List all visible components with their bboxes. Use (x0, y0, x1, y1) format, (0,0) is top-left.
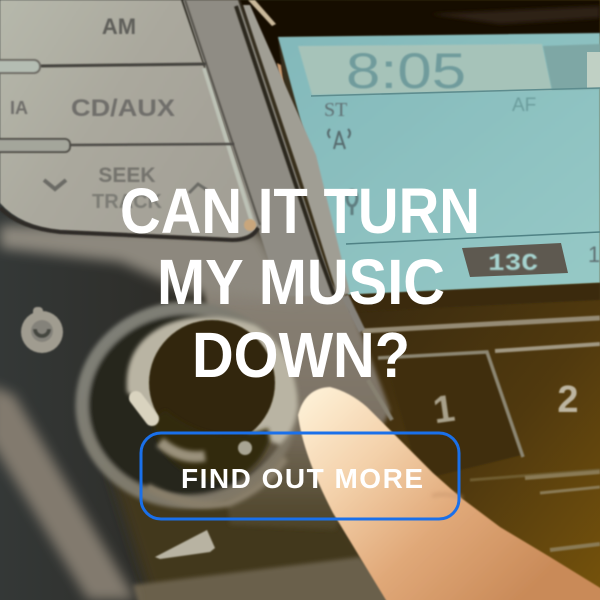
icon: chevron up (189, 184, 207, 193)
knob lower reflections (160, 442, 205, 457)
knob core (149, 320, 275, 446)
display rule upper (311, 88, 600, 96)
clock: 8:05 (346, 43, 466, 99)
warm corner glint (244, 219, 256, 231)
label partial A: IA (10, 98, 28, 118)
outer ring (82, 308, 292, 502)
button outline (141, 433, 459, 519)
preset 1 key (385, 352, 522, 480)
button: find out more (141, 433, 459, 519)
badge: 13C (462, 243, 568, 278)
light crescent (127, 316, 298, 445)
label 1: 1 (431, 388, 457, 432)
grey band below button panel (0, 225, 300, 300)
label AM: AM (102, 14, 136, 39)
label TRACK: TRACK (92, 191, 163, 213)
knob shadow base (152, 410, 270, 482)
preset 1 outline (378, 352, 523, 457)
icon: power symbol (21, 307, 63, 353)
right knob side shade (240, 400, 296, 480)
orange sliver (277, 63, 288, 114)
recess glint (248, 0, 276, 26)
dark seam beside strip (236, 6, 334, 295)
preset left seam (368, 380, 392, 420)
icon: pointing finger (298, 387, 600, 600)
bezel seam (185, 0, 260, 225)
preset button area (345, 283, 600, 600)
screen surface (278, 33, 600, 295)
icon: light triangle mark (155, 530, 215, 559)
recess highlight (430, 6, 600, 24)
finger crease (432, 494, 462, 498)
label CD/AUX: CD/AUX (71, 95, 175, 122)
panel: control knob (82, 308, 298, 505)
icon: antenna (328, 129, 350, 149)
icon: microphone (347, 190, 357, 215)
divider lower (0, 139, 234, 152)
rail left (345, 296, 362, 331)
central grey fascia (200, 245, 390, 530)
bezel below screen (345, 283, 600, 312)
light strip beside screen (243, 5, 350, 296)
lower centre lighter fascia (133, 557, 410, 600)
rails lower (470, 470, 600, 550)
lower centre brown area (110, 470, 420, 600)
preset 2 outline (495, 344, 600, 351)
panel: preset buttons (345, 283, 600, 550)
panel bottom shadow (0, 208, 258, 240)
diagonal strip lower left (0, 385, 136, 600)
divider upper (0, 60, 206, 73)
title line 3: DOWN? (192, 319, 410, 391)
title line 1: CAN IT TURN (120, 175, 480, 247)
knob indicator highlight (136, 398, 152, 419)
label AF: AF (512, 95, 536, 116)
panel: upper left buttons (0, 0, 260, 240)
panel: display screen (278, 33, 600, 295)
label SEEK: SEEK (98, 164, 156, 187)
dark segment (543, 44, 600, 90)
label ST: ST (324, 99, 347, 121)
gloss right edge (204, 68, 252, 222)
finger shape (298, 387, 600, 600)
title (120, 175, 480, 391)
bezel strip (183, 0, 336, 296)
rail upper (362, 318, 600, 331)
knob side glint (238, 441, 252, 455)
label 1: 1 (588, 242, 600, 267)
button panel surface (0, 0, 258, 238)
display rule lower (346, 232, 600, 244)
light segment (587, 52, 600, 88)
lower ring highlight (147, 458, 285, 505)
clock band (298, 44, 552, 95)
top black recess (240, 0, 600, 118)
icon: chevron down (44, 180, 66, 189)
button label: FIND OUT MORE (181, 463, 423, 494)
title line 2: MY MUSIC (157, 246, 445, 318)
badge: 13C: 13C (488, 251, 538, 278)
label 2: 2 (557, 379, 579, 421)
